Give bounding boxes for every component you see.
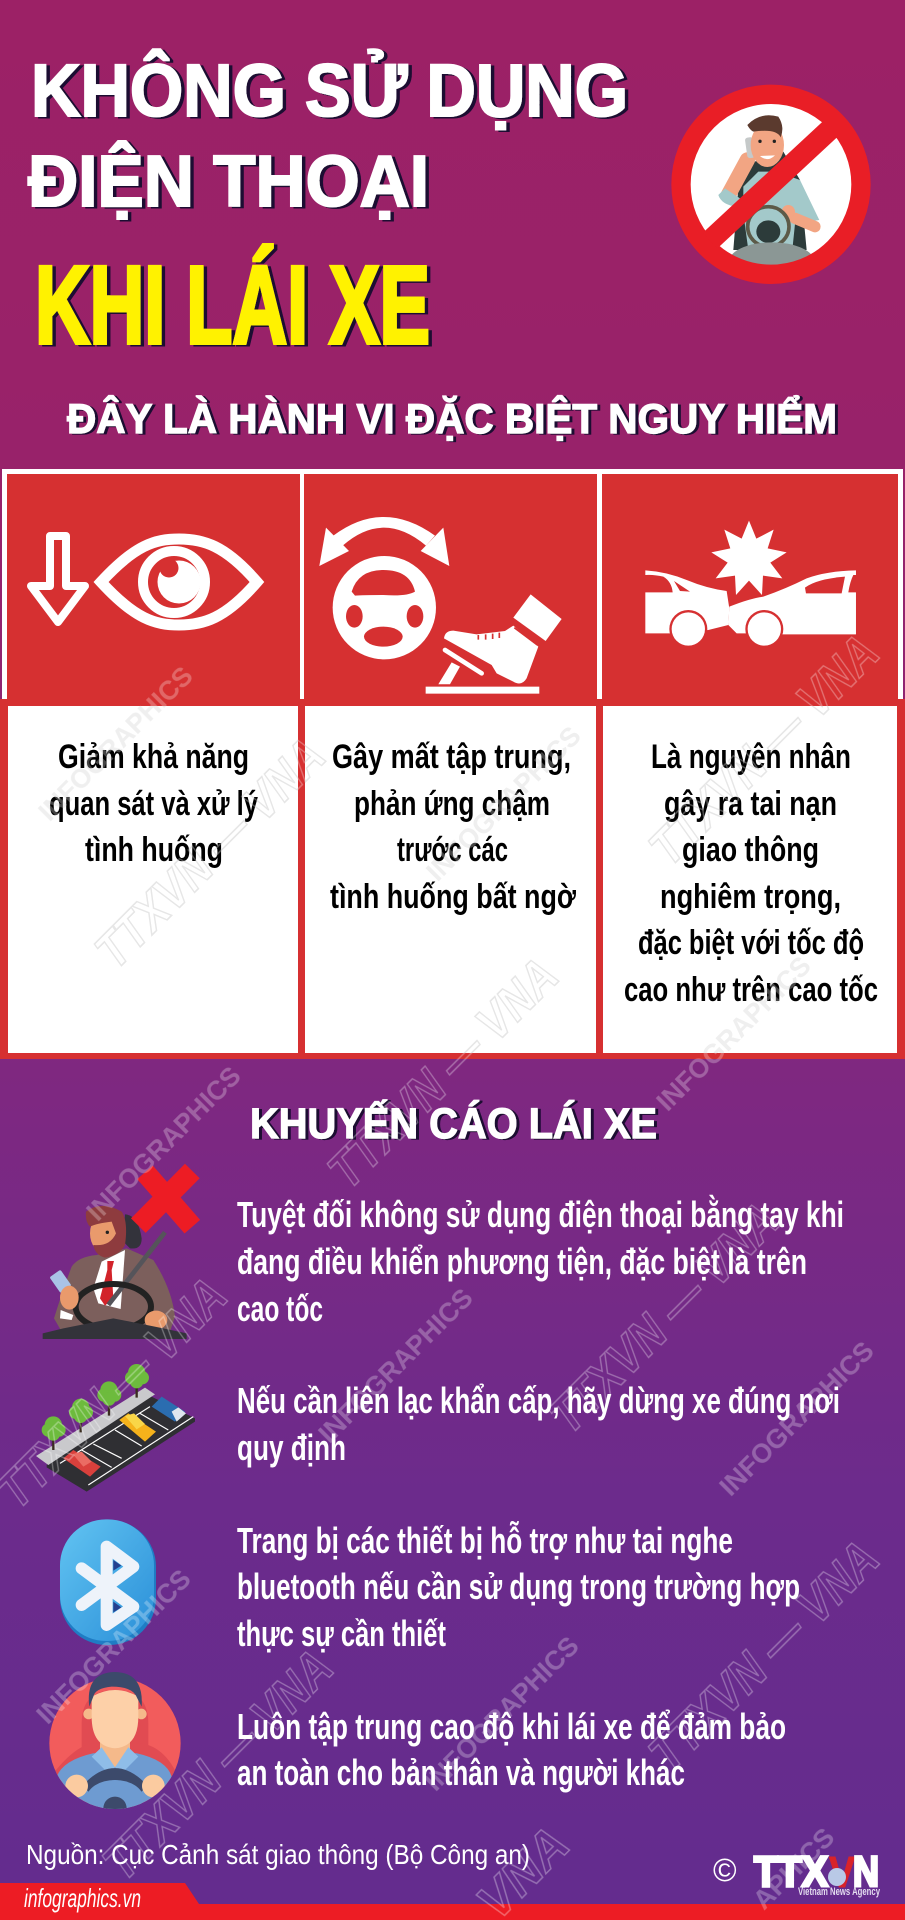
watermark on white cells: TTXVN — VNA [317,947,569,1199]
watermarks: INFOGRAPHICS [714,1336,880,1502]
text: website: infographics.vn [24,1883,141,1913]
text: advice 4: an toàn cho bản thân và người khác [237,1752,685,1793]
watermarks: TTXVN — VNA [92,1639,344,1891]
watermarks: INFOGRAPHICS [33,661,199,827]
watermarks: TTXVN — VNA [84,727,336,979]
text: cell 3: nghiêm trọng, [660,878,841,916]
logo letter V: V [829,1848,856,1897]
white frame [2,469,903,699]
watermark on white cells: TTXVN — VNA [84,727,336,979]
watermarks [0,624,890,1920]
title line 1: KHÔNG SỬ DỤNG [31,49,628,132]
text: advice 3: thực sự cần thiết [237,1613,446,1654]
text: advice 2: quy định [237,1427,346,1468]
watermarks: INFOGRAPHICS [313,1283,479,1449]
icon: parking lot [36,1364,195,1492]
watermarks: APHICS [747,1822,840,1915]
title [28,49,628,367]
text: cell 2: trước các [397,831,508,869]
icon: no phone while driving [681,94,861,281]
text: cell 2 [330,738,577,916]
text: advice 1: cao tốc [237,1288,323,1329]
icon: steering wheel and pedal [319,517,562,694]
watermark on white cells: INFOGRAPHICS [651,951,817,1117]
watermarks: INFOGRAPHICS [421,721,587,887]
icon: focused driver [49,1672,181,1820]
text: cell 1: Giảm khả năng [58,738,249,776]
icon: car crash [645,521,856,648]
text: cell 3 [624,738,878,1009]
heading: especially dangerous behaviour: ĐÂY LÀ HÀNH VI ĐẶC BIỆT NGUY HIỂM [67,394,837,442]
panel: three risks [0,469,905,1059]
white cell 2 [305,706,596,1053]
icon: driver holding phone with red cross [43,1171,192,1339]
logo: TTXVN with copyright [713,1848,881,1898]
red band [0,474,905,1059]
title line 3 highlighted: KHI LÁI XE [35,244,430,367]
watermarks: INFOGRAPHICS [81,1061,247,1227]
text: cell 3: gây ra tai nạn [664,785,837,823]
watermarks: INFOGRAPHICS [419,1631,585,1797]
watermarks: TTXVN — VNA [317,947,569,1199]
white cell 3 [603,706,897,1053]
watermarks: INFOGRAPHICS [31,1564,197,1730]
logo letter N: N [853,1848,879,1896]
watermarks: TTXVN — VNA [538,1192,790,1444]
text: cell 1: quan sát và xử lý [49,785,258,823]
heading: driving advice: KHUYẾN CÁO LÁI XE [250,1100,657,1148]
logo letters TTX: TTX [754,1848,828,1896]
text: cell 1: tình huống [85,831,223,869]
text: source: Nguồn: Cục Cảnh sát giao thông (Bộ Công an) [26,1839,530,1870]
text: advice 4 [237,1706,786,1793]
text: advice 3: Trang bị các thiết bị hỗ trợ như tai nghe [237,1520,733,1561]
watermark on white cells: INFOGRAPHICS [33,661,199,827]
copyright mark: © [713,1852,737,1888]
watermark on white cells: INFOGRAPHICS [421,721,587,887]
text: advice 2 [237,1380,840,1468]
text: cell 3: Là nguyên nhân [651,738,851,776]
icon: arrow down [31,536,85,622]
title line 2: ĐIỆN THOẠI [28,141,429,222]
text: cell 2: Gây mất tập trung, [332,738,571,776]
text: cell 1 [49,738,258,869]
text: advice 3 [237,1520,800,1654]
footer red band [0,1883,905,1920]
text: cell 2: phản ứng chậm [354,785,550,823]
white cell 1 [8,706,298,1053]
text: cell 3: giao thông [682,831,819,869]
icon: bluetooth [60,1519,156,1645]
watermarks: INFOGRAPHICS [651,951,817,1117]
text: cell 2: tình huống bất ngờ [330,878,577,916]
text: advice 1 [237,1193,844,1329]
icon: eye [101,539,257,625]
watermark on white cells [38,706,830,1053]
logo globe [828,1868,846,1886]
